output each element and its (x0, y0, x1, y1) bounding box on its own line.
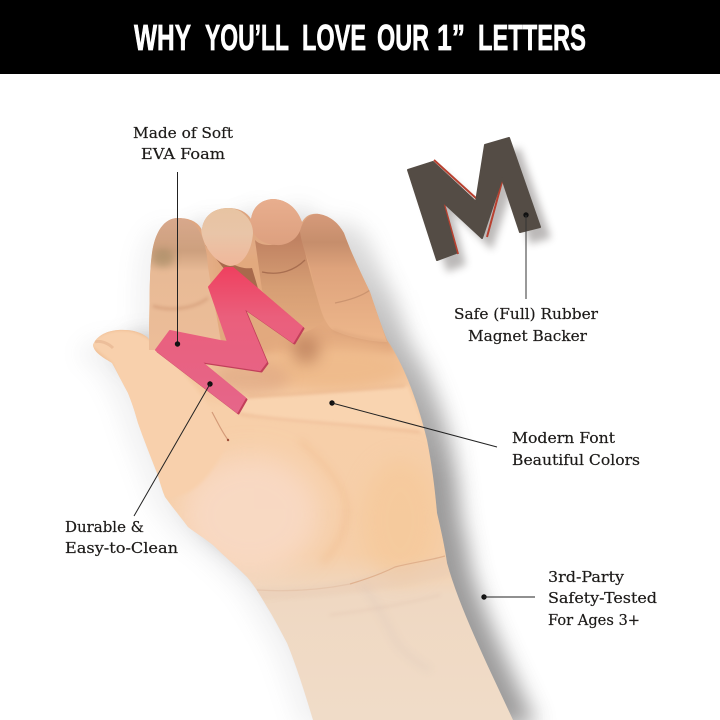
dark magnet letter M shadow (417, 148, 551, 272)
palm creases and tones (176, 387, 445, 609)
callout: safety tested: For Ages 3+ (548, 611, 640, 629)
callout: durable (65, 381, 213, 557)
hand shadow (79, 205, 537, 720)
photo: child's hand (90, 199, 513, 720)
pinky finger (300, 214, 387, 342)
curled finger (201, 208, 253, 266)
title: LETTERS (478, 17, 586, 58)
third finger (250, 199, 318, 332)
title (134, 17, 586, 58)
middle finger body (205, 245, 258, 288)
callout: safety tested (481, 568, 657, 629)
index finger (149, 218, 222, 350)
title: 1” (437, 17, 465, 58)
callout: modern font: Beautiful Colors (512, 451, 640, 469)
title bar (0, 0, 720, 74)
callout: soft EVA foam: Made of Soft (133, 124, 233, 142)
callout: magnet backer: Magnet Backer (468, 327, 588, 345)
callout: soft EVA foam (133, 124, 233, 347)
callout: magnet backer: Safe (Full) Rubber (454, 305, 599, 323)
title: OUR (377, 17, 429, 58)
callout: magnet backer (454, 212, 599, 345)
thumb (90, 330, 229, 497)
pink foam letter M (156, 268, 304, 414)
magnet backer letter M (408, 138, 540, 260)
callout: durable: Durable & (65, 518, 144, 536)
callout: modern font: Modern Font (512, 429, 615, 447)
callout: safety tested: 3rd-Party (548, 568, 625, 586)
callout: soft EVA foam: EVA Foam (141, 145, 225, 163)
palm shading under fingers (210, 255, 405, 394)
title: LOVE (302, 17, 366, 58)
title: YOU’LL (205, 17, 289, 58)
callout: durable: Easy-to-Clean (65, 539, 178, 557)
callout: modern font (329, 400, 640, 469)
title: WHY (134, 17, 191, 58)
callout: safety tested: Safety-Tested (548, 589, 657, 607)
